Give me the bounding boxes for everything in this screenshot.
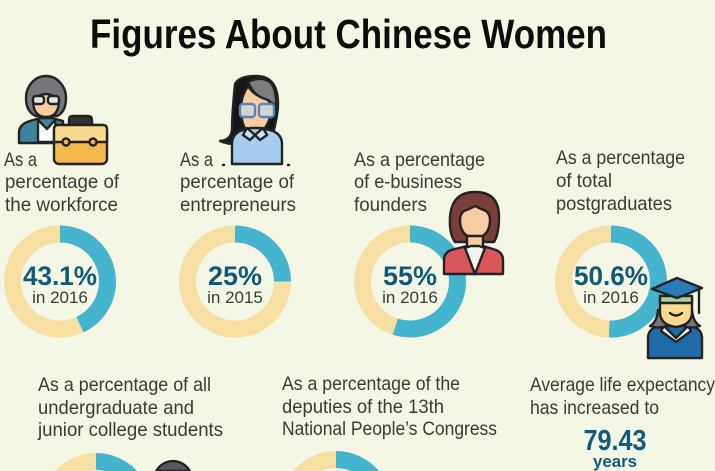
text: undergraduate caption: undergraduate and [38, 397, 194, 419]
text: undergraduate caption: As a percentage of all [38, 374, 211, 396]
panel: workforce [4, 76, 120, 329]
text: e-business caption: of e-business [354, 171, 462, 193]
text: undergraduate caption: junior college students [37, 419, 223, 441]
title: Figures About Chinese Women [90, 11, 607, 57]
donut: 55%: 55% [383, 261, 437, 291]
text: undergraduate caption [37, 374, 223, 441]
donut: 55%: in 2016 [382, 288, 438, 307]
donut: 25% [188, 234, 282, 329]
donut: undergraduates [55, 453, 137, 471]
donut: 50.6% [564, 234, 658, 329]
text: postgraduates caption: As a percentage [556, 147, 685, 169]
text: entrepreneurs caption: percentage of [180, 171, 295, 193]
stat: 79.43 years: 79.43 [584, 425, 646, 457]
panel: NPC deputies [282, 373, 497, 471]
panel: undergraduates [37, 374, 223, 471]
text: deputies caption [282, 373, 497, 440]
text: deputies caption: deputies of the 13th [282, 396, 444, 418]
text: postgraduates caption: of total [556, 170, 612, 192]
panel: postgraduates [556, 147, 702, 358]
donut: 43.1%: in 2016 [32, 288, 88, 307]
donut: 50.6%: in 2016 [583, 288, 639, 307]
text: workforce caption: the workforce [5, 194, 118, 216]
text: life expectancy caption [530, 374, 715, 419]
text: deputies caption: National People’s Congress [282, 418, 497, 440]
text: workforce caption: percentage of [5, 171, 120, 193]
text: postgraduates caption [556, 147, 685, 215]
donut: 25%: in 2015 [207, 288, 263, 307]
text: deputies caption: As a percentage of the [282, 373, 460, 395]
donut: deputies [293, 451, 379, 471]
text: entrepreneurs caption: As a [180, 149, 213, 171]
text: postgraduates caption: postgraduates [556, 193, 672, 215]
text: workforce caption: As a [4, 149, 37, 171]
text: e-business caption: founders [354, 194, 427, 216]
panel: entrepreneurs [180, 76, 296, 329]
donut: 25%: 25% [208, 261, 262, 291]
icon: graduate [648, 278, 702, 358]
text: life expectancy caption: has increased to [530, 397, 659, 419]
stat: 79.43 years: years [593, 452, 637, 471]
stat: 79.43 years [584, 425, 646, 471]
donut: 43.1% [12, 234, 108, 329]
icon: businesswoman [444, 192, 503, 274]
donut: 50.6%: 50.6% [574, 261, 648, 291]
panel: life expectancy [530, 374, 715, 471]
text: entrepreneurs caption: entrepreneurs [180, 194, 296, 216]
text: e-business caption [354, 149, 485, 216]
donut: 55% [362, 234, 458, 329]
panel: e-business founders [354, 149, 503, 329]
icon: woman with briefcase [19, 76, 107, 164]
text: workforce caption [4, 149, 120, 216]
text: e-business caption: As a percentage [354, 149, 485, 171]
icon: student head [156, 461, 190, 471]
donut: 43.1%: 43.1% [23, 261, 97, 291]
icon: woman with glasses [220, 76, 289, 165]
text: entrepreneurs caption [180, 149, 296, 216]
